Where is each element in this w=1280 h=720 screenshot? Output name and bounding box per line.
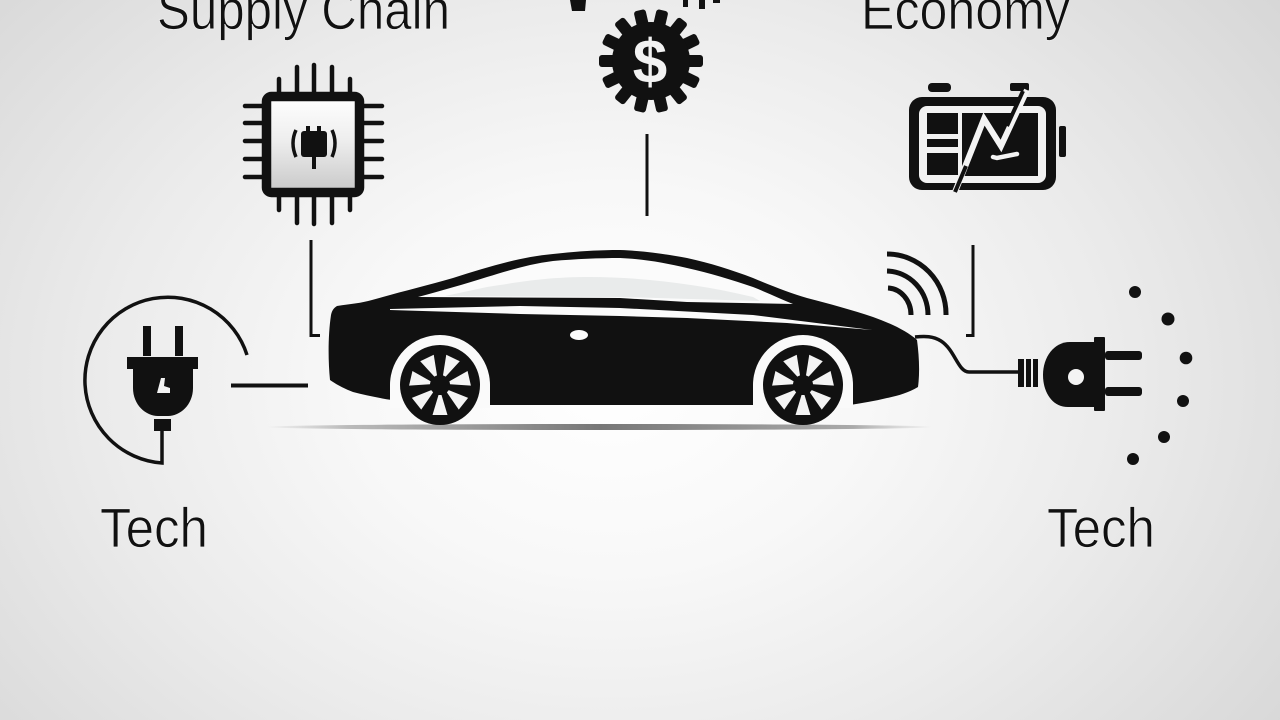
car xyxy=(329,250,919,425)
rear wheel arch xyxy=(390,335,490,408)
window reflection xyxy=(445,277,760,301)
chip body xyxy=(266,96,360,192)
plug prongs xyxy=(1105,351,1142,360)
front wheel xyxy=(763,345,843,425)
tick mark xyxy=(993,154,1017,158)
belt line highlight xyxy=(390,306,872,330)
plug flange xyxy=(1094,337,1105,411)
battery inner frame xyxy=(919,106,1046,183)
rear wheel xyxy=(400,345,480,425)
dollar sign: $ xyxy=(633,28,667,97)
icon: battery dashboard xyxy=(909,83,1066,192)
connector: chip to car xyxy=(311,240,320,336)
gear teeth xyxy=(599,9,703,113)
ground shadow xyxy=(266,424,934,430)
connector: gear to car xyxy=(646,134,648,216)
circular cord xyxy=(85,297,247,463)
window xyxy=(418,258,793,304)
plug neck xyxy=(154,419,171,431)
plug prongs xyxy=(143,326,151,356)
strain relief xyxy=(1018,359,1038,387)
connector: battery to car xyxy=(966,245,973,336)
dotted spark arc xyxy=(1127,286,1192,465)
icon: left plug in circle xyxy=(85,297,247,463)
icon: microchip xyxy=(245,65,382,224)
battery panels xyxy=(927,113,1038,176)
front wheel arch xyxy=(753,335,853,408)
chip centre symbol xyxy=(293,126,335,169)
icon: wireless signal xyxy=(887,254,946,315)
icon: cropped top centre icon xyxy=(570,0,720,11)
car body xyxy=(329,250,919,405)
battery terminals xyxy=(928,83,1066,157)
icon: dollar gear xyxy=(599,9,703,113)
plug head xyxy=(127,357,198,416)
charging cable xyxy=(915,336,1018,372)
door handle xyxy=(570,330,588,340)
label: Tech left: Tech xyxy=(100,496,208,559)
label: Tech right: Tech xyxy=(1047,496,1155,559)
plug bolt mark xyxy=(157,378,170,393)
icon: right plug xyxy=(1018,337,1142,411)
plug body xyxy=(1043,342,1105,407)
lightning bolt xyxy=(955,90,1027,192)
plug eye xyxy=(1068,369,1084,385)
connector: left plug to car xyxy=(231,384,308,388)
chip pins xyxy=(245,65,382,224)
battery casing xyxy=(909,97,1056,190)
